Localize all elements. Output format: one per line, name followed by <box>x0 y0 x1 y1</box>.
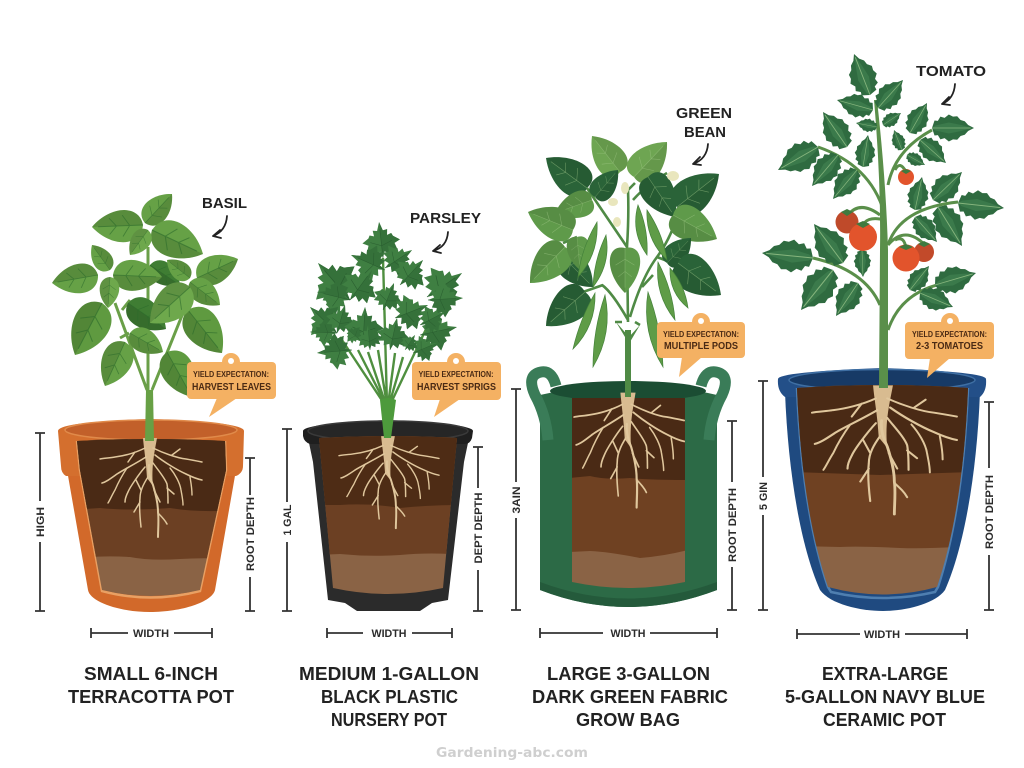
dimension: dept depth: DEPT DEPTH <box>473 492 485 564</box>
roots <box>812 385 957 514</box>
dimension: 3ain: 3AIN <box>511 486 523 514</box>
dimension: root depth <box>727 421 739 610</box>
arrow: green bean <box>693 144 708 165</box>
arrow: parsley <box>433 232 448 253</box>
dimension: width: WIDTH <box>610 628 646 640</box>
yield tag: multiple pods <box>657 313 745 377</box>
tomatoes <box>836 169 934 272</box>
yield tag: 2-3 tomatoes: 2-3 TOMATOES <box>916 341 983 352</box>
panel: green bean in fabric grow bag <box>511 105 745 730</box>
plant: green bean <box>518 127 732 397</box>
yield tag: harvest leaves <box>187 353 276 417</box>
yield tag: harvest leaves: YIELD EXPECTATION: <box>193 370 269 379</box>
roots <box>574 393 684 508</box>
dimension: width <box>91 628 212 640</box>
caption: medium black plastic pot: NURSERY POT <box>331 710 447 730</box>
soil layers <box>319 436 457 594</box>
caption: extra-large ceramic pot: CERAMIC POT <box>823 710 946 730</box>
pot: terracotta <box>58 419 244 612</box>
yield tag: multiple pods: MULTIPLE PODS <box>664 341 738 352</box>
soil layers <box>795 380 970 600</box>
yield tag: harvest sprigs: HARVEST SPRIGS <box>417 382 496 393</box>
dimension: width: WIDTH <box>133 628 169 640</box>
soil layers <box>77 439 226 596</box>
dimension: width: WIDTH <box>372 628 407 640</box>
caption: small terracotta pot: SMALL 6-INCH <box>84 664 218 684</box>
dimension: dept depth <box>473 447 485 611</box>
caption: small terracotta pot: TERRACOTTA POT <box>68 687 234 707</box>
yield tag: 2-3 tomatoes <box>905 313 994 378</box>
plant: basil <box>50 185 244 441</box>
plant: tomato <box>760 49 1006 388</box>
dimension: root depth: ROOT DEPTH <box>727 488 739 562</box>
caption: large fabric grow bag: GROW BAG <box>576 710 680 730</box>
yield tag: harvest sprigs <box>412 353 501 417</box>
caption: medium black plastic pot: BLACK PLASTIC <box>321 687 458 707</box>
dimension: width: WIDTH <box>864 629 900 641</box>
label: green bean: GREEN <box>676 105 732 122</box>
roots <box>339 436 439 528</box>
yield tag: multiple pods: YIELD EXPECTATION: <box>663 330 739 339</box>
label: green bean: BEAN <box>684 124 726 141</box>
caption: large fabric grow bag: DARK GREEN FABRIC <box>532 687 728 707</box>
plant: parsley <box>296 220 474 438</box>
caption: extra-large ceramic pot: EXTRA-LARGE <box>822 664 948 684</box>
arrow: tomato <box>942 84 955 105</box>
dimension: root depth <box>984 402 996 610</box>
dimension: high: HIGH <box>35 507 47 537</box>
pot: black plastic <box>303 420 473 611</box>
pot: navy blue ceramic <box>778 368 986 611</box>
yield tag: harvest sprigs: YIELD EXPECTATION: <box>418 370 494 379</box>
yield tag: 2-3 tomatoes: YIELD EXPECTATION: <box>912 330 987 339</box>
label: basil: BASIL <box>202 195 247 212</box>
dimension: 5 gin <box>758 381 770 610</box>
dimension: width <box>797 629 967 641</box>
dimension: root depth: ROOT DEPTH <box>984 475 996 549</box>
grow bag: dark green fabric <box>532 372 725 607</box>
dimension: high <box>35 433 47 611</box>
caption: large fabric grow bag: LARGE 3-GALLON <box>547 664 710 684</box>
dimension: 5 gin: 5 GIN <box>758 482 770 510</box>
label: tomato: TOMATO <box>916 63 986 80</box>
soil layers <box>570 395 688 592</box>
panel: parsley in black plastic pot <box>282 210 501 730</box>
dimension: 1 gal <box>282 429 294 611</box>
caption: extra-large ceramic pot: 5-GALLON NAVY BLUE <box>785 687 985 707</box>
panel: tomato in navy ceramic pot <box>758 49 1006 730</box>
yield tag: harvest leaves: HARVEST LEAVES <box>192 382 271 393</box>
dimension: root depth <box>245 458 257 611</box>
footer: website: Gardening-abc.com <box>436 746 588 761</box>
roots <box>100 438 202 537</box>
panel: basil in terracotta pot <box>35 185 276 707</box>
dimension: root depth: ROOT DEPTH <box>245 497 257 571</box>
dimension: width <box>327 628 452 640</box>
label: parsley: PARSLEY <box>410 210 481 227</box>
dimension: 3ain <box>511 389 523 610</box>
arrow: basil <box>213 216 227 238</box>
dimension: width <box>540 628 717 640</box>
dimension: 1 gal: 1 GAL <box>282 504 294 536</box>
caption: medium black plastic pot: MEDIUM 1-GALLON <box>299 664 479 684</box>
